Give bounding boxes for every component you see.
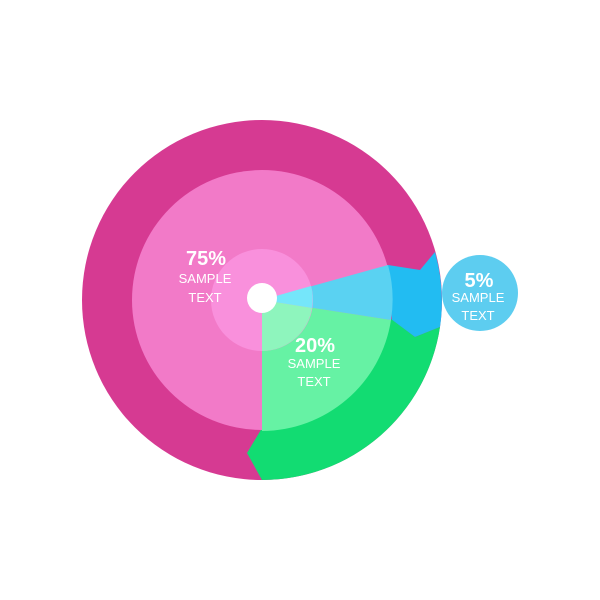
- inner pink: [211, 249, 313, 351]
- panel: donut chart: [82, 120, 442, 480]
- label 75%: TEXT: [188, 290, 222, 305]
- outer ring green segment: [247, 319, 440, 480]
- middle pink slice: [132, 170, 392, 430]
- callout: 5%: [442, 255, 518, 331]
- label 75%: [179, 248, 232, 305]
- label 20%: [288, 335, 341, 389]
- label 75%: SAMPLE: [179, 271, 232, 286]
- label 20%: 20%: [295, 335, 335, 357]
- label 20%: TEXT: [297, 374, 331, 389]
- callout: 5%: TEXT: [461, 308, 495, 323]
- center hole: [247, 283, 277, 313]
- callout: 5%: SAMPLE: [452, 290, 505, 305]
- middle green slice: [262, 300, 391, 431]
- middle blue slice: [262, 265, 393, 320]
- callout: 5%: 5%: [465, 270, 494, 292]
- inner blue: [262, 286, 313, 308]
- label 75%: 75%: [186, 248, 226, 270]
- label 20%: SAMPLE: [288, 356, 341, 371]
- outer ring blue segment: [388, 252, 442, 337]
- outer ring magenta: [82, 120, 442, 480]
- inner green: [262, 300, 312, 351]
